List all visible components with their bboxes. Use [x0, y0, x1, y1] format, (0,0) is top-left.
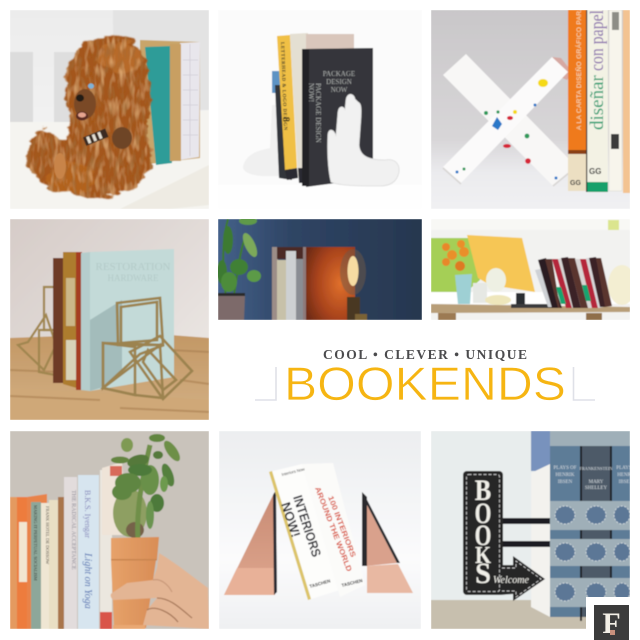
- books: RESTORATION: [96, 261, 171, 273]
- books: HARDWARE: [108, 273, 159, 283]
- books: [53, 249, 174, 391]
- sign board with arrow: [463, 471, 545, 601]
- blue ornate books: PLAYS: [616, 466, 632, 471]
- right brass cubes: [103, 298, 192, 399]
- row of books: FRANK HOTEL DE DOSSOW: [45, 506, 50, 565]
- blue ornate books: IBSEN: [558, 480, 573, 485]
- row of books: B.K.S. Iyengar: [83, 490, 92, 538]
- sign board with arrow: K: [475, 541, 492, 568]
- title: BOOKENDS: [284, 357, 566, 410]
- panel: copper triangle bookends: [219, 431, 421, 629]
- books: [568, 6, 630, 193]
- wood block: [306, 247, 355, 320]
- spine books: 8: [280, 117, 291, 122]
- panel: shelf with books and pillows: [431, 219, 630, 320]
- panel: plush Chewbacca bookend: [10, 10, 209, 209]
- panel: terrazzo X bookend: [431, 6, 630, 209]
- pillows: [431, 235, 636, 305]
- panel: brass cube bookends: [10, 219, 209, 420]
- row of books: THE RADICAL ACCEPTANCE: [70, 490, 76, 570]
- spine books: PACKAGE DESIGN: [314, 83, 322, 143]
- row of books: [10, 462, 128, 629]
- sign board with arrow: Welcome: [493, 575, 530, 586]
- row of books: Light on Yoga: [82, 552, 93, 609]
- panel: succulent pot bookend: [10, 431, 209, 629]
- right hand: [328, 94, 399, 186]
- face: [74, 83, 96, 120]
- books: 100 INTERIORS: [326, 494, 358, 558]
- maroon books: [535, 257, 612, 308]
- sign connector bars: [503, 518, 550, 547]
- heading block: [255, 347, 595, 410]
- blue ornate books: FRANKENSTEIN: [579, 466, 613, 471]
- terracotta pot: [111, 537, 159, 629]
- left hand: [243, 105, 282, 176]
- blue ornate books: MARY: [589, 480, 604, 485]
- books: NOW!: [278, 500, 304, 539]
- spine books: DESIGN: [326, 78, 352, 86]
- spine books: PACKAGE: [323, 70, 355, 78]
- vase and flowers: [442, 240, 525, 307]
- blue ornate books: [550, 431, 632, 621]
- spine books: NOW: [331, 86, 348, 94]
- left copper triangle: [224, 490, 277, 595]
- books: AROUND THE WORLD: [313, 485, 354, 573]
- row of books: MAKING IT PERPETUAL SOCIALISM: [33, 505, 38, 581]
- books: TASCHEN: [341, 578, 363, 588]
- plant: [217, 217, 261, 320]
- books: GG: [570, 180, 581, 187]
- blue ornate books: SHELLEY: [585, 486, 607, 491]
- spine books: NOW!: [307, 83, 315, 102]
- panel: BOOKS welcome sign bookend: [431, 431, 632, 629]
- X shape: [443, 54, 572, 186]
- right copper triangle: [362, 492, 413, 593]
- sign board with arrow: S: [475, 557, 491, 590]
- spine books: [272, 33, 373, 187]
- Chewbacca plush: [28, 35, 153, 196]
- books: Interiors Now: [281, 466, 305, 477]
- spine text: LETTERHEAD & LOGO DESIGN: [279, 42, 287, 131]
- blue ornate books: PLAYS OF: [553, 466, 577, 471]
- bandolier: [83, 128, 109, 146]
- books: TASCHEN: [309, 578, 331, 589]
- hand: [111, 553, 209, 629]
- books: [269, 463, 365, 600]
- sign board with arrow: O: [475, 519, 491, 552]
- shelf: [431, 304, 630, 320]
- logo badge: [586, 597, 640, 640]
- sign board with arrow: B: [475, 474, 491, 507]
- left brass cubes: [18, 287, 56, 375]
- plant: [111, 434, 183, 540]
- books behind plush: [140, 40, 200, 165]
- blue ornate books: HENRIK: [556, 473, 575, 478]
- title brackets: [255, 367, 595, 400]
- books: A LA CARTA DISEÑO GRÁFICO PARA: [574, 6, 583, 130]
- blue ornate books: HENR: [617, 473, 631, 478]
- panel: white hand bookends: [243, 32, 400, 188]
- logo badge: F: [602, 607, 621, 640]
- books: [272, 247, 307, 320]
- bulb: [340, 249, 367, 320]
- blue ornate books: IBSE: [619, 480, 629, 485]
- books: GG: [589, 167, 601, 176]
- tagline: COOL • CLEVER • UNIQUE: [323, 347, 527, 362]
- panel: Edison lamp bookend: [218, 219, 422, 320]
- books: diseñar: [587, 74, 608, 130]
- sign board with arrow: O: [475, 497, 491, 530]
- books: INTERIORS: [290, 493, 324, 559]
